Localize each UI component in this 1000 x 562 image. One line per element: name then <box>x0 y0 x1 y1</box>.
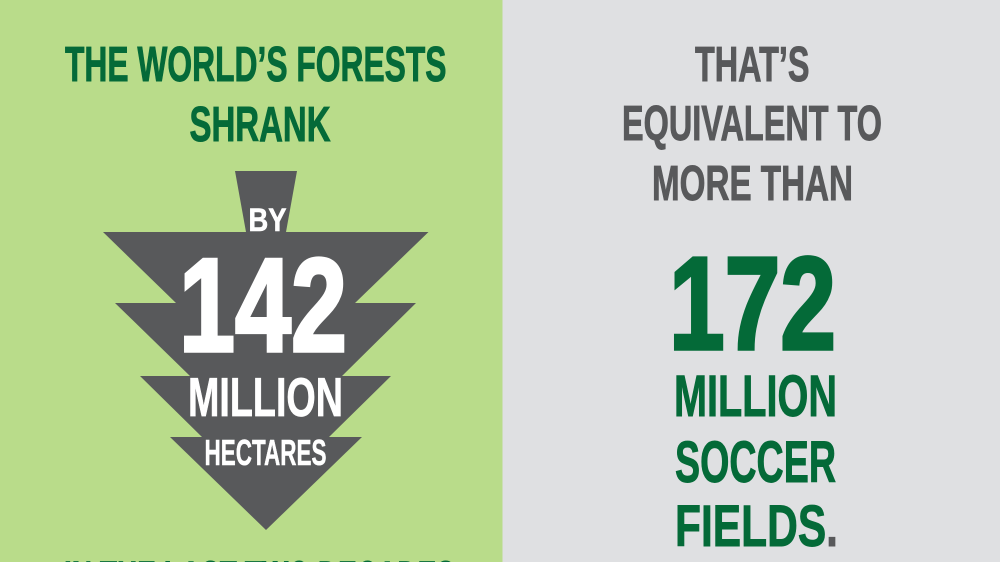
heading: the world's forests shrank: THE WORLD’S FORESTS <box>65 38 447 92</box>
icon: downward tree arrow <box>103 171 428 530</box>
text: million soccer fields: SOCCER <box>675 430 836 495</box>
text: million: MILLION <box>188 366 343 428</box>
text: million soccer fields: MILLION <box>674 364 837 429</box>
text: million soccer fields <box>674 364 838 559</box>
heading: that's equivalent to more than: MORE THAN <box>652 157 853 211</box>
text: hectares: HECTARES <box>204 432 326 473</box>
panel: left forest loss <box>0 0 502 562</box>
heading: that's equivalent to more than: THAT’S <box>695 38 810 92</box>
text: by: BY <box>248 202 286 238</box>
number: 172: 172 <box>669 230 836 377</box>
text: million soccer fields: FIELDS. <box>675 494 838 559</box>
heading: the world's forests shrank <box>65 38 447 152</box>
number: 142: 142 <box>179 232 347 380</box>
heading: that's equivalent to more than <box>622 38 882 211</box>
heading: the world's forests shrank: SHRANK <box>190 98 330 152</box>
panel: right equivalence <box>502 0 1000 562</box>
